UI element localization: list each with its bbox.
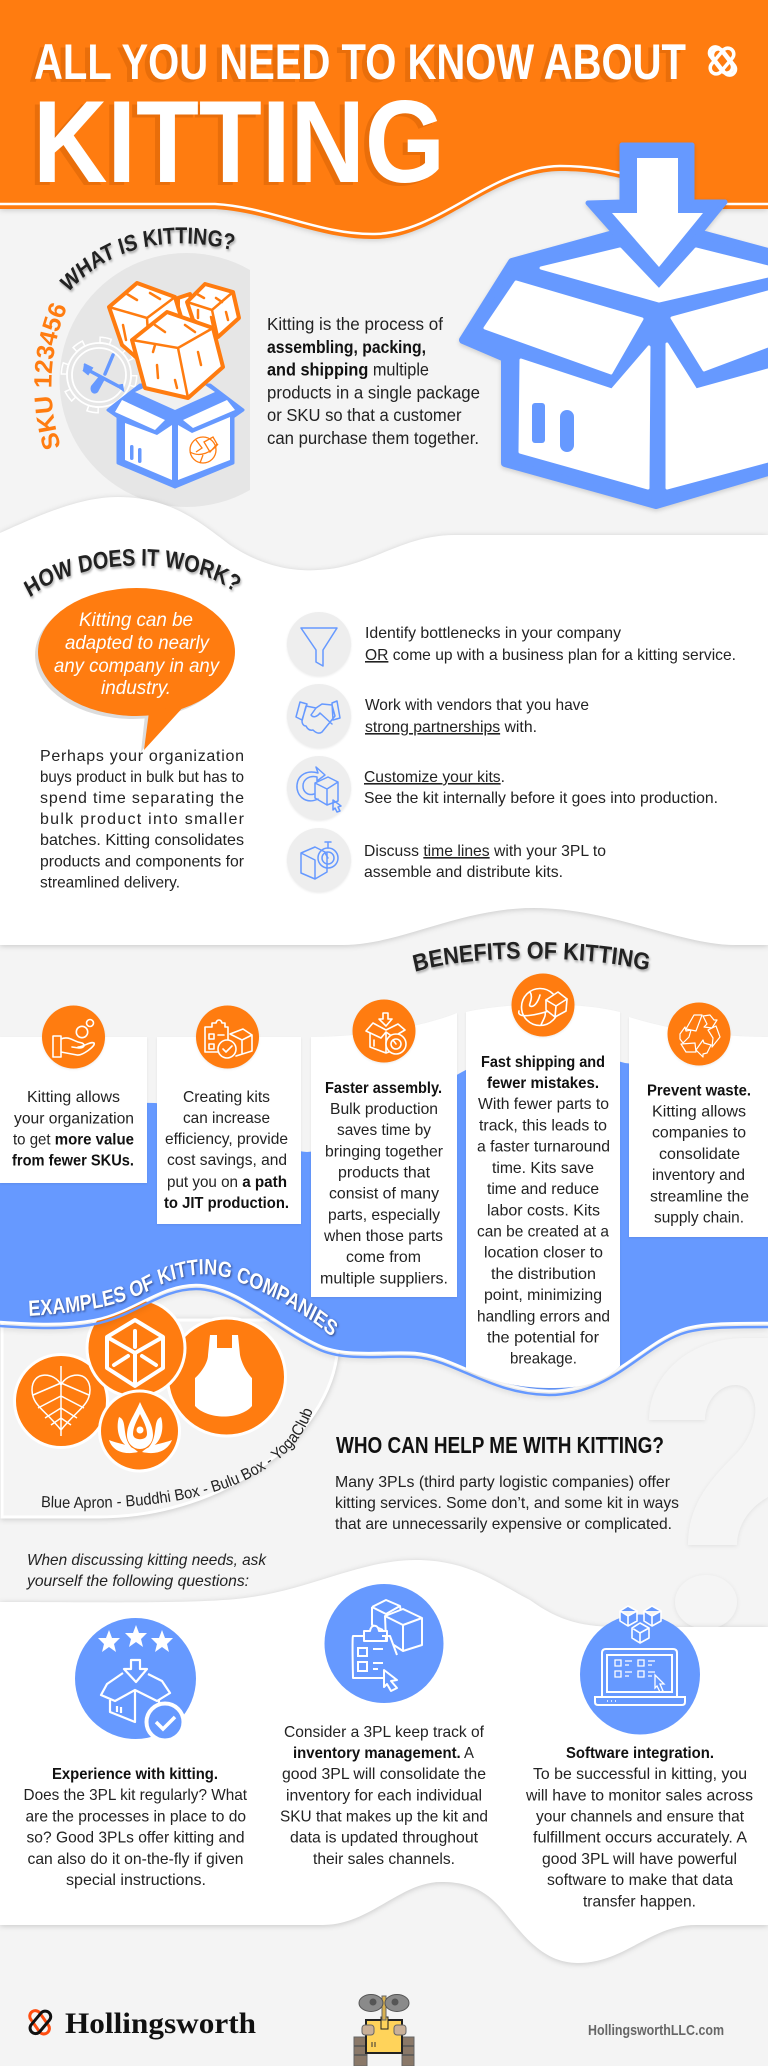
benefit 4 text: a faster turnaround [477,1139,610,1156]
benefit 4 text: point, minimizing [484,1287,602,1304]
text block: software integration: will have to monitor sales across [525,1787,753,1804]
text block: bulk product explanation: streamlined delivery. [40,874,180,892]
benefit 4 text: the distribution [491,1266,596,1283]
benefit 1 text: from fewer SKUs. [12,1152,134,1170]
text block: software integration: To be successful in kitting, you [533,1766,747,1783]
icon: large question mark [649,1338,768,1629]
text block: inventory management [280,1724,488,1868]
callout: speech bubble: industry. [101,678,171,699]
benefit 5 text: supply chain. [654,1210,744,1227]
text block: intro to questions: yourself the following questions: [26,1573,249,1590]
benefit 5 text: Kitting allows [652,1103,746,1120]
header banner [0,0,768,239]
text block: software integration: software to make that data [547,1872,733,1889]
text block: software integration: transfer happen. [583,1893,696,1910]
icon: header logo [707,44,738,78]
text block: bulk product explanation: bulk product into smaller [40,811,245,828]
text block: software integration: fulfillment occurs accurately. A [533,1830,747,1847]
benefit 5 text: companies to [652,1125,746,1142]
text block: intro to questions [26,1552,267,1590]
callout: speech bubble: Kitting can be [79,610,193,631]
text block: inventory management: their sales channels. [313,1851,455,1868]
panel: benefit 3 [311,1000,457,1297]
step 4 text [364,843,606,881]
text block: who can help: Many 3PLs (third party logistic companies) offer [335,1474,671,1491]
benefit 3 text: Bulk production [330,1101,438,1118]
text block: who can help: kitting services. Some don’t, and some kit in ways [335,1495,679,1512]
panel: how does it work background [0,497,768,945]
icon: hand with coins [42,1006,105,1068]
benefit 4 text: time and reduce [487,1181,599,1198]
text block: bulk product explanation: Perhaps your organization [40,748,244,765]
panel: examples of kitting companies [0,1300,342,1522]
text block: who can help: that are unnecessarily expensive or complicated. [335,1516,672,1533]
icon: large open box with arrow [463,145,768,505]
icon: hexagonal box logo [87,1299,185,1397]
benefit 3 text: products that [338,1165,431,1182]
title [33,34,686,207]
text block: software integration: your channels and ensure that [536,1809,745,1826]
benefit 4 text: breakage. [510,1351,577,1368]
benefit 4 text: handling errors and [477,1308,610,1325]
text block: experience with kitting [24,1766,248,1889]
benefit 5 text: consolidate [659,1146,740,1163]
step 2 text [365,697,589,736]
icon: globe and cube [512,974,574,1036]
benefit 4 text: Fast shipping and [481,1054,605,1071]
text block: definition of kitting: products in a single package [267,382,480,402]
benefit 4 text [477,1054,610,1368]
text block: intro to questions: When discussing kitting needs, ask [27,1552,267,1569]
step 2 text: strong partnerships with. [365,719,537,736]
heading: benefits of kitting: BENEFITS OF KITTING [412,942,651,974]
icon: leaf logo [14,1354,108,1448]
text block: definition of kitting: can purchase them together. [267,428,479,448]
benefit 3 text: when those parts [323,1228,443,1245]
benefit 3 text: multiple suppliers. [320,1270,448,1287]
benefit 1 text: to get more value [13,1132,134,1148]
text block: experience with kitting: so? Good 3PLs offer kitting and [26,1830,244,1847]
benefit 2 text: cost savings, and [167,1152,287,1169]
text block: software integration: good 3PL will have powerful [542,1851,737,1868]
benefit 3 text: come from [346,1249,421,1266]
text block: inventory management: good 3PL will consolidate the [282,1766,486,1783]
benefit 3 text: parts, especially [328,1207,440,1224]
text block: inventory management: Consider a 3PL keep track of [284,1724,485,1741]
benefit 2 text: Creating kits [183,1089,270,1106]
text block: definition of kitting: and shipping multiple [267,360,429,380]
text block: bulk product explanation: products and components for [40,854,245,870]
callout: speech bubble: any company in any [54,656,220,677]
text block: software integration: Software integration. [566,1745,714,1762]
icon: box with stopwatch [287,828,351,892]
icon: recycle [668,1002,730,1066]
icon: lotus logo [100,1391,180,1471]
text block: software integration [525,1745,753,1910]
callout: speech bubble: adapted to nearly [65,633,210,654]
text block: inventory management: inventory for each individual [286,1787,482,1804]
icon: inventory management [324,1584,444,1703]
text block: bulk product explanation: spend time separating the [40,790,244,807]
callout: speech bubble [35,588,235,752]
text block: inventory management: SKU that makes up the kit and [280,1809,488,1826]
step 3 text [364,769,718,807]
icon: experience with kitting [75,1618,196,1740]
icon: funnel [287,612,351,676]
text block: definition of kitting: or SKU so that a customer [267,405,462,425]
panel: benefit 4 [466,974,620,1388]
benefit 4 text: can be created at a [477,1224,609,1240]
text block: definition of kitting [267,314,480,448]
icon: robot [354,1994,414,2066]
panel: benefit 5 [629,1002,768,1237]
benefit 1 text [12,1089,134,1170]
footer logo: Hollingsworth [65,2007,256,2040]
icon: customize box [287,756,351,820]
text block: experience with kitting: special instructions. [66,1872,206,1889]
icon: Hollingsworth mark [28,2008,53,2036]
title: KITTING [33,76,445,207]
benefit 3 text: Faster assembly. [325,1080,442,1097]
benefit 5 text: Prevent waste. [647,1082,751,1099]
step 1 text: OR come up with a business plan for a kitting service. [365,647,736,664]
heading: who can help: WHO CAN HELP ME WITH KITTING? [336,1432,664,1458]
benefit 2 text [164,1089,289,1212]
icon: handshake [287,684,351,748]
benefit 2 text: to JIT production. [164,1195,289,1212]
text block: definition of kitting: assembling, packing, [267,337,426,357]
text block: experience with kitting: Does the 3PL kit regularly? What [24,1787,248,1804]
icon: orange cartons [109,283,239,398]
text block: experience with kitting: Experience with kitting. [52,1766,218,1783]
benefit 5 text [647,1082,751,1227]
panel: questions background [0,1560,768,1963]
benefit 3 text: bringing together [325,1143,444,1160]
step 2 text: Work with vendors that you have [365,697,589,714]
text block: who can help [335,1474,679,1533]
icon: box with timer [352,1000,416,1062]
benefit 5 text: streamline the [650,1188,749,1205]
benefit 2 text: put you on a path [167,1174,287,1191]
icon: clipboard and box [196,1006,259,1068]
heading: examples of kitting companies: EXAMPLES OF KITTING COMPANIES [28,1258,340,1338]
benefit 3 text [320,1080,448,1287]
step 3 text: See the kit internally before it goes into production. [364,790,718,807]
benefit 1 text: your organization [14,1110,134,1127]
step 4 text: Discuss time lines with your 3PL to [364,843,606,860]
benefit 2 text: efficiency, provide [165,1131,288,1148]
benefit 4 text: labor costs. Kits [487,1202,600,1219]
benefit 3 text: consist of many [329,1186,439,1203]
text block: bulk product explanation: batches. Kitting consolidates [40,832,244,849]
icon: software integration [580,1606,700,1734]
chart background: blue wave band [0,1054,768,1395]
icon: small blue open box [108,385,243,487]
icon: gear with tools [64,340,134,410]
text block: inventory management: inventory management. A [293,1745,474,1762]
step 1 text [365,625,736,664]
benefit 4 text: With fewer parts to [478,1096,609,1113]
text block: bulk product explanation [40,748,245,892]
benefit 4 text: time. Kits save [492,1160,594,1177]
company names on arc: Blue Apron - Buddhi Box - Bulu Box - YogaClub [42,1408,312,1512]
benefit 4 text: the potential for [487,1330,600,1346]
benefit 4 text: fewer mistakes. [487,1075,599,1092]
text block: experience with kitting: are the processes in place to do [26,1809,246,1826]
benefit 5 text: inventory and [652,1167,745,1184]
footer website: HollingsworthLLC.com [588,2023,724,2039]
text block: bulk product explanation: buys product in bulk but has to [40,769,244,786]
benefit 4 text: location closer to [484,1245,603,1262]
text block: definition of kitting: Kitting is the process of [267,314,443,334]
heading: SKU 123456: SKU 123456 [34,303,66,450]
text block: experience with kitting: can also do it on-the-fly if given [28,1851,244,1868]
step 1 text: Identify bottlenecks in your company [365,625,621,642]
heading: what is kitting: WHAT IS KITTING? [59,227,236,293]
step 4 text: assemble and distribute kits. [364,864,563,881]
icon: blue apron logo [168,1318,286,1436]
panel: benefit 2 [157,1006,301,1224]
panel: benefit 1 [0,1006,147,1183]
benefit 2 text: can increase [183,1110,270,1127]
benefit 4 text: track, this leads to [479,1118,607,1134]
list: how it works steps [287,612,736,892]
benefit 3 text: saves time by [337,1122,431,1139]
panel: what is kitting illustration [60,253,250,507]
text block: inventory management: data is updated throughout [290,1830,479,1847]
heading: how does it work: HOW DOES IT WORK? [24,549,242,600]
benefit 1 text: Kitting allows [27,1089,120,1106]
step 3 text: Customize your kits. [364,769,505,786]
